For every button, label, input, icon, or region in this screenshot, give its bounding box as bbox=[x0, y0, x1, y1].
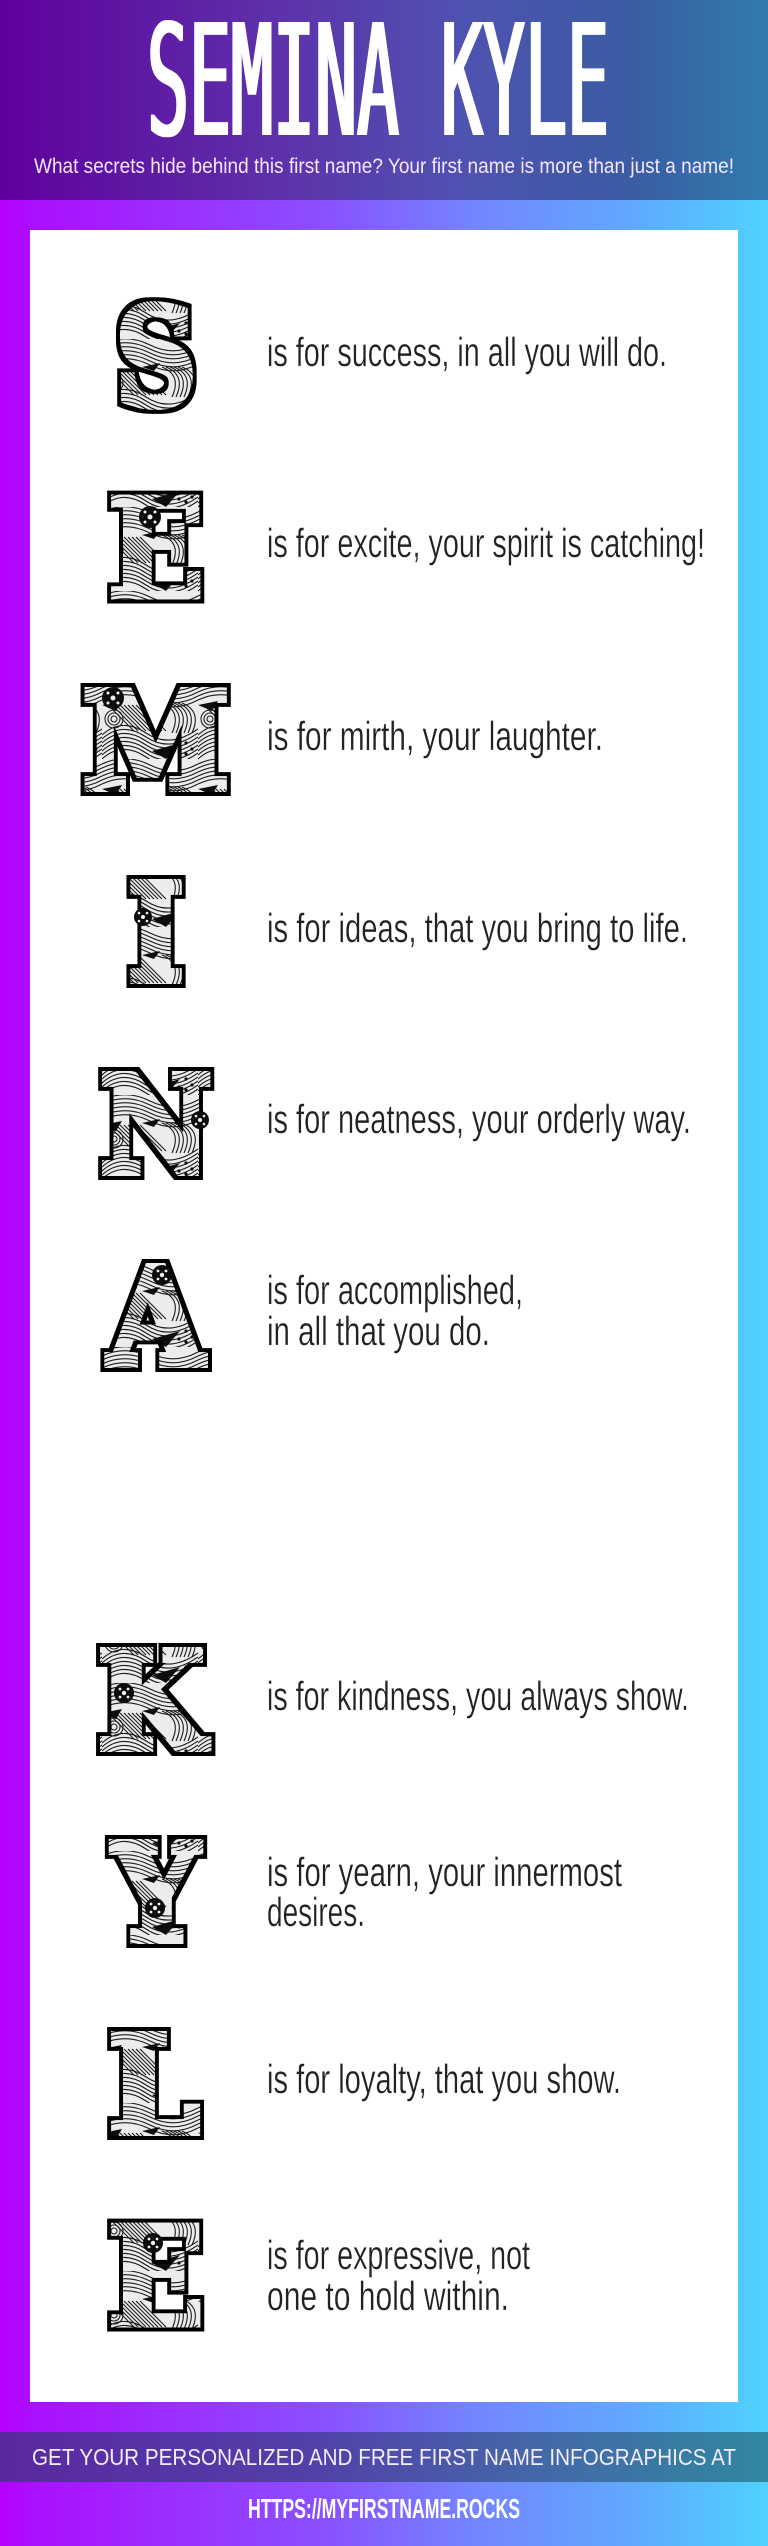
text: Y lines bbox=[267, 1849, 622, 1935]
panel: white letters panel bbox=[30, 230, 738, 2402]
text: M line: is for mirth, your laughter. bbox=[267, 713, 603, 759]
icon: flower in E2 bbox=[143, 2233, 163, 2253]
text: E lines: is for expressive, not bbox=[267, 2232, 530, 2278]
row: E2 bbox=[108, 2197, 530, 2358]
row: A bbox=[107, 1240, 523, 1396]
icon: flower in K bbox=[114, 1683, 134, 1703]
icon: letter E: E bbox=[108, 469, 204, 630]
icon: flower in Y bbox=[145, 1898, 165, 1918]
row: Y bbox=[112, 1816, 622, 1972]
icon: flower in A bbox=[152, 1265, 172, 1285]
icon: letter I: I bbox=[128, 856, 184, 1012]
icon: letter M: M bbox=[83, 664, 229, 820]
text: A lines: in all that you do. bbox=[267, 1308, 490, 1354]
icon: letter A: A bbox=[107, 1240, 205, 1396]
icon: flower in I bbox=[134, 908, 152, 926]
icon: letter Y: Y bbox=[112, 1816, 200, 1972]
icon: letter N: N bbox=[100, 1048, 212, 1204]
text: L line: is for loyalty, that you show. bbox=[267, 2056, 621, 2102]
footer link: HTTPS://MYFIRSTNAME.ROCKS bbox=[248, 2493, 520, 2524]
icon: letter L: L bbox=[109, 2008, 199, 2164]
icon: letter S: S bbox=[116, 280, 196, 436]
text: Y lines: desires. bbox=[267, 1889, 365, 1935]
icon: letter K: K bbox=[98, 1624, 208, 1780]
row: N bbox=[100, 1048, 691, 1204]
text: E lines: one to hold within. bbox=[267, 2273, 509, 2319]
icon: flower in E bbox=[139, 506, 161, 528]
text: E lines bbox=[267, 2232, 530, 2319]
row: M bbox=[83, 664, 603, 820]
icon: flower in M bbox=[102, 687, 124, 709]
icon: flower in N bbox=[191, 1111, 209, 1129]
text: A lines bbox=[267, 1267, 523, 1354]
header band bbox=[0, 0, 768, 200]
footer band bbox=[0, 2432, 768, 2482]
icon: letter E: E bbox=[108, 2197, 204, 2358]
row: I bbox=[128, 856, 688, 1012]
row: E bbox=[108, 469, 705, 630]
text: Y lines: is for yearn, your innermost bbox=[267, 1849, 622, 1895]
row: K bbox=[98, 1624, 689, 1780]
text: A lines: is for accomplished, bbox=[267, 1267, 523, 1313]
row: L bbox=[109, 2008, 621, 2164]
row: S bbox=[116, 280, 667, 436]
